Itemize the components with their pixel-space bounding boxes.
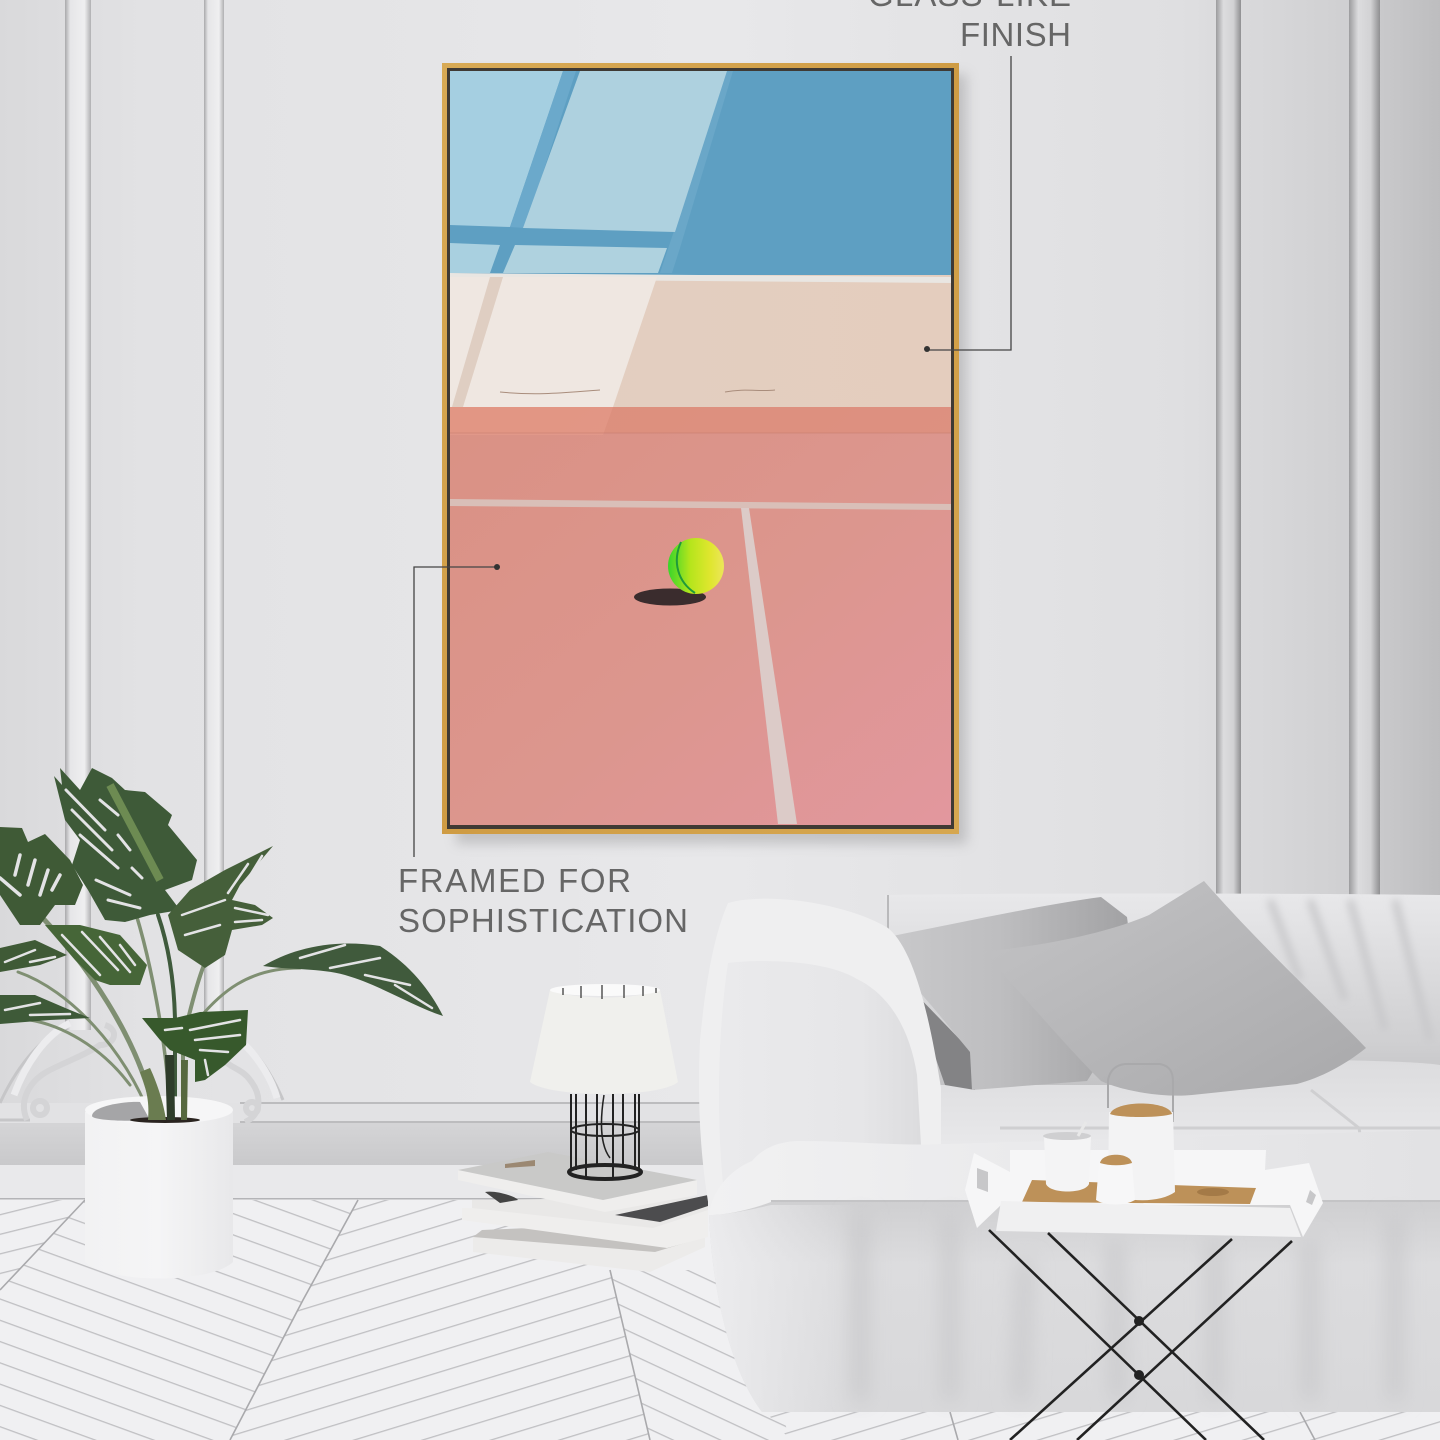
sofa back	[885, 894, 1440, 1110]
sofa front cushion top	[709, 1130, 1440, 1215]
front pillow	[982, 881, 1366, 1096]
back drapes	[1270, 900, 1430, 1040]
painting: cream wall	[450, 275, 951, 409]
callout: framed for sophistication: SOPHISTICATION	[398, 902, 688, 939]
callout: glass-like finish: FINISH	[960, 16, 1071, 53]
cream wall lit area	[450, 277, 657, 407]
sofa arm	[699, 899, 941, 1233]
floor	[0, 1198, 1440, 1440]
tall jar	[1108, 1104, 1175, 1200]
sofa	[699, 881, 1440, 1412]
frame	[442, 63, 959, 834]
callout: glass-like finish	[868, 0, 1071, 352]
book stack	[458, 1152, 708, 1272]
leaf: left middle	[45, 925, 147, 985]
small jar	[1096, 1155, 1135, 1204]
court lines	[450, 499, 951, 510]
sofa front panel	[709, 1201, 1440, 1412]
painting: blue wall	[450, 71, 951, 277]
tennis ball	[668, 538, 724, 594]
front panel left light	[709, 1205, 860, 1412]
tray	[965, 1150, 1323, 1237]
leaf: left top	[0, 827, 83, 925]
plant	[0, 768, 443, 1116]
leaf: bottom	[142, 1010, 248, 1082]
ball shadow	[634, 588, 706, 606]
side table	[965, 1064, 1323, 1440]
cup	[1043, 1122, 1091, 1192]
window light panes	[450, 71, 733, 273]
wall ornaments	[24, 1025, 258, 1122]
rear pillow	[867, 897, 1129, 1090]
wall moldings	[0, 0, 1380, 1165]
leaf: long right	[263, 943, 443, 1016]
framed artwork	[442, 63, 967, 844]
sofa gap shadow	[912, 990, 975, 1090]
leaf: top center	[54, 768, 197, 922]
seat cushions	[930, 1060, 1440, 1230]
plant pot	[85, 1055, 233, 1278]
leaf: left lower	[0, 940, 90, 1024]
baseboard	[0, 1165, 720, 1199]
callout: framed for sophistication: FRAMED FOR	[398, 862, 631, 899]
painting: court	[450, 407, 951, 825]
table lamp	[530, 984, 678, 1179]
front drapes	[860, 1215, 1395, 1400]
callout: framed for sophistication	[398, 564, 688, 939]
arm front panel	[719, 961, 921, 1200]
jar handle	[1108, 1064, 1173, 1122]
leaf: right upper	[168, 846, 273, 968]
